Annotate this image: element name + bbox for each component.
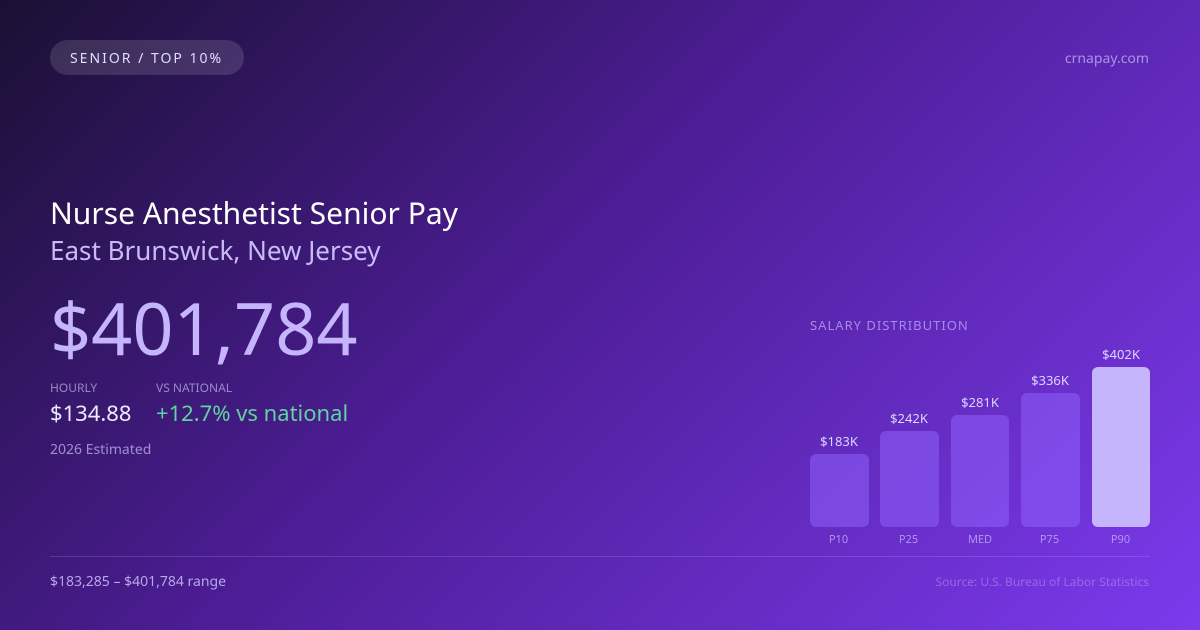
source note: Source: U.S. Bureau of Labor Statistics [936, 573, 1149, 590]
bar median [951, 415, 1009, 527]
vs national label: VS NATIONAL [156, 379, 232, 396]
title: Nurse Anesthetist Senior Pay [50, 192, 458, 233]
value P90: $402K [1102, 345, 1140, 363]
chart heading: SALARY DISTRIBUTION [810, 316, 969, 334]
bar P10 [810, 454, 868, 527]
label P90: P90 [1111, 532, 1130, 547]
salary range: $183,285 – $401,784 range [50, 572, 226, 591]
label median: MED [968, 532, 992, 547]
location subtitle: East Brunswick, New Jersey [50, 232, 381, 268]
headline salary: $401,784 [50, 279, 358, 377]
value P10: $183K [820, 432, 858, 450]
hourly value: $134.88 [50, 398, 131, 428]
estimate note: 2026 Estimated [50, 440, 151, 459]
label P10: P10 [829, 532, 848, 547]
label P75: P75 [1040, 532, 1059, 547]
stat: vs national [156, 379, 348, 428]
value P75: $336K [1031, 371, 1069, 389]
badge: senior / top 10% [50, 40, 244, 75]
label P25: P25 [899, 532, 918, 547]
bar P25 [880, 431, 939, 527]
bar P75 [1021, 393, 1080, 527]
value P25: $242K [890, 409, 928, 427]
value median: $281K [961, 393, 999, 411]
badge: senior / top 10%: SENIOR / TOP 10% [70, 49, 223, 68]
site name: crnapay.com [1065, 49, 1149, 68]
vs national value: +12.7% vs national [156, 398, 348, 428]
hourly label: HOURLY [50, 379, 97, 396]
stat: hourly [50, 379, 131, 428]
bar P90 [1092, 367, 1150, 527]
